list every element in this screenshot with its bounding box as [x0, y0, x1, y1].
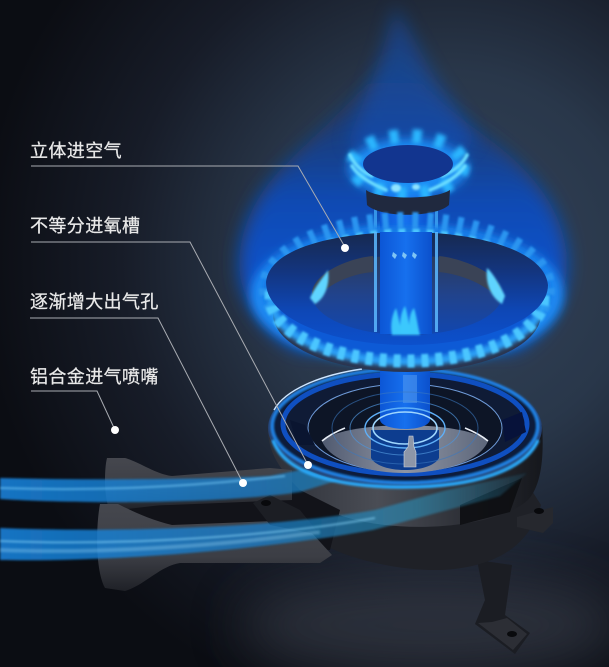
- upper stream: [0, 469, 345, 502]
- flame halo ring: [259, 233, 555, 357]
- tube junction: [253, 495, 320, 535]
- ring hole: [312, 255, 502, 335]
- electrode: [404, 436, 416, 467]
- ring top: [266, 232, 548, 345]
- inner flame right: [487, 268, 505, 304]
- ripples: [373, 412, 437, 444]
- labels: [30, 141, 159, 387]
- dot 4: [111, 426, 119, 434]
- rear leg foot: [475, 560, 530, 654]
- lower port glints: [391, 184, 420, 192]
- rim highlight: [273, 440, 538, 487]
- back flames: [267, 220, 547, 356]
- mounting lug right: [517, 507, 553, 533]
- floor reflection: [240, 575, 609, 667]
- base ring: [371, 430, 439, 470]
- burner body and legs: [268, 425, 553, 654]
- bottom flames: [271, 235, 543, 361]
- hole inner wall: [312, 256, 502, 302]
- dark panel left: [290, 420, 315, 445]
- label lines: [30, 166, 345, 483]
- small flame haze: [348, 139, 468, 197]
- leader 1: [31, 166, 345, 247]
- bowl: [268, 425, 543, 527]
- inner well: [308, 384, 502, 472]
- small cap: [363, 145, 453, 183]
- air streams: [0, 469, 527, 560]
- lower plate: [310, 480, 541, 570]
- top plume: [348, 5, 475, 162]
- lower burner ring: [268, 368, 542, 488]
- reflected dots: [392, 252, 417, 259]
- label 2: 不等分进氧槽: [30, 216, 140, 236]
- label 3: 逐渐增大出气孔: [30, 292, 159, 312]
- small base: [366, 190, 450, 215]
- dot 3: [239, 479, 247, 487]
- central column: [374, 190, 438, 350]
- column side lines: [374, 205, 377, 345]
- upper tube: [105, 458, 292, 510]
- upper flame glow: [239, 5, 567, 357]
- dot 2: [304, 461, 312, 469]
- label 1: 立体进空气: [30, 141, 122, 161]
- far flames through column: [391, 306, 420, 335]
- leader 2: [31, 242, 308, 465]
- small burner: [348, 136, 468, 215]
- outer rim: [268, 368, 542, 488]
- inlet tubes: [97, 458, 340, 591]
- back flame haze: [264, 226, 550, 350]
- stream highlights: [0, 532, 320, 551]
- dark panel right: [502, 412, 526, 442]
- large burner ring: [264, 220, 550, 372]
- dot 1: [341, 244, 349, 252]
- leader 4: [31, 391, 115, 430]
- column: [380, 190, 432, 350]
- lower column: [380, 370, 430, 429]
- bottom flame band: [271, 238, 543, 362]
- inner flame left: [310, 270, 328, 304]
- teardrop aura: [239, 40, 567, 350]
- small flame highlights: [350, 155, 467, 190]
- label 4: 铝合金进气喷嘴: [30, 367, 159, 387]
- small flames: [353, 136, 463, 194]
- dark gap between tubes: [130, 490, 340, 550]
- lower tube: [97, 504, 332, 591]
- leader dots: [111, 244, 349, 487]
- leader 3: [30, 318, 243, 483]
- dark slot: [460, 478, 522, 525]
- lower stream: [0, 473, 527, 560]
- silver disc: [322, 425, 488, 473]
- ring base: [273, 256, 541, 372]
- column in hole: [380, 232, 432, 334]
